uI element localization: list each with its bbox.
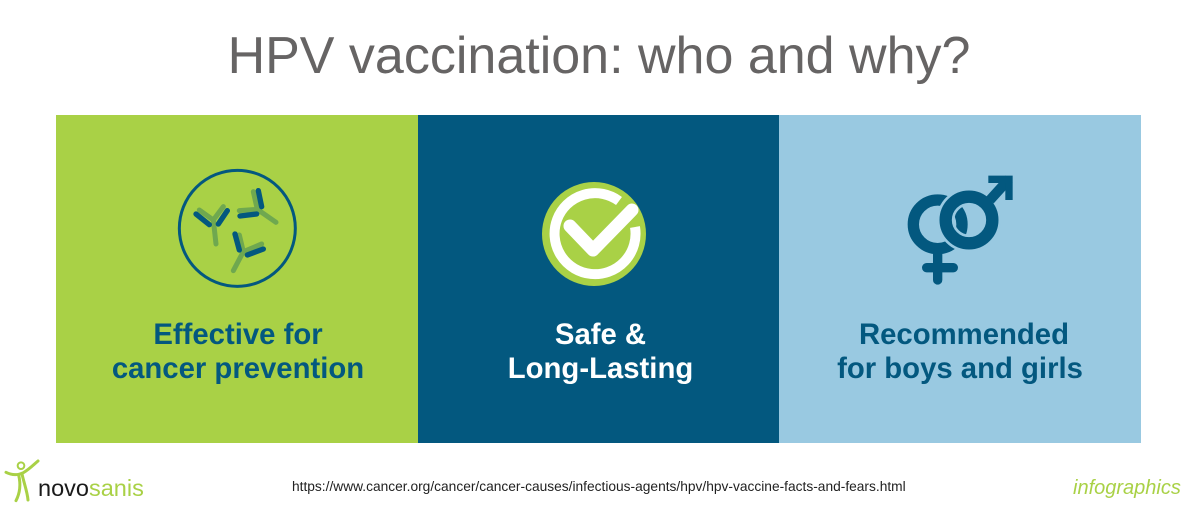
heading: effective: Effective for	[153, 318, 323, 351]
panel: safe and long-lasting	[418, 115, 779, 443]
icon: antibodies in circle	[179, 170, 295, 286]
heading: safe: Long-Lasting	[508, 352, 693, 385]
panel: recommended for boys and girls	[779, 115, 1141, 443]
heading: recommended	[837, 318, 1083, 385]
icon: check mark badge	[542, 182, 646, 286]
heading: recommended: Recommended	[859, 318, 1069, 351]
logo wordmark: novosanis	[38, 475, 144, 501]
panel: effective for cancer prevention	[56, 115, 418, 443]
heading: effective: cancer prevention	[112, 352, 364, 385]
title: HPV vaccination: who and why?	[228, 27, 970, 85]
logo figure	[6, 461, 38, 501]
heading: effective	[112, 318, 364, 385]
icon: gender symbols	[913, 179, 1009, 280]
infographics tag: infographics	[1073, 477, 1181, 499]
heading: safe	[508, 318, 693, 385]
heading: recommended: for boys and girls	[837, 352, 1083, 385]
heading: safe: Safe &	[555, 318, 646, 351]
source url: https://www.cancer.org/cancer/cancer-causes/infectious-agents/hpv/hpv-vaccine-facts-and-fears.html	[292, 479, 906, 494]
